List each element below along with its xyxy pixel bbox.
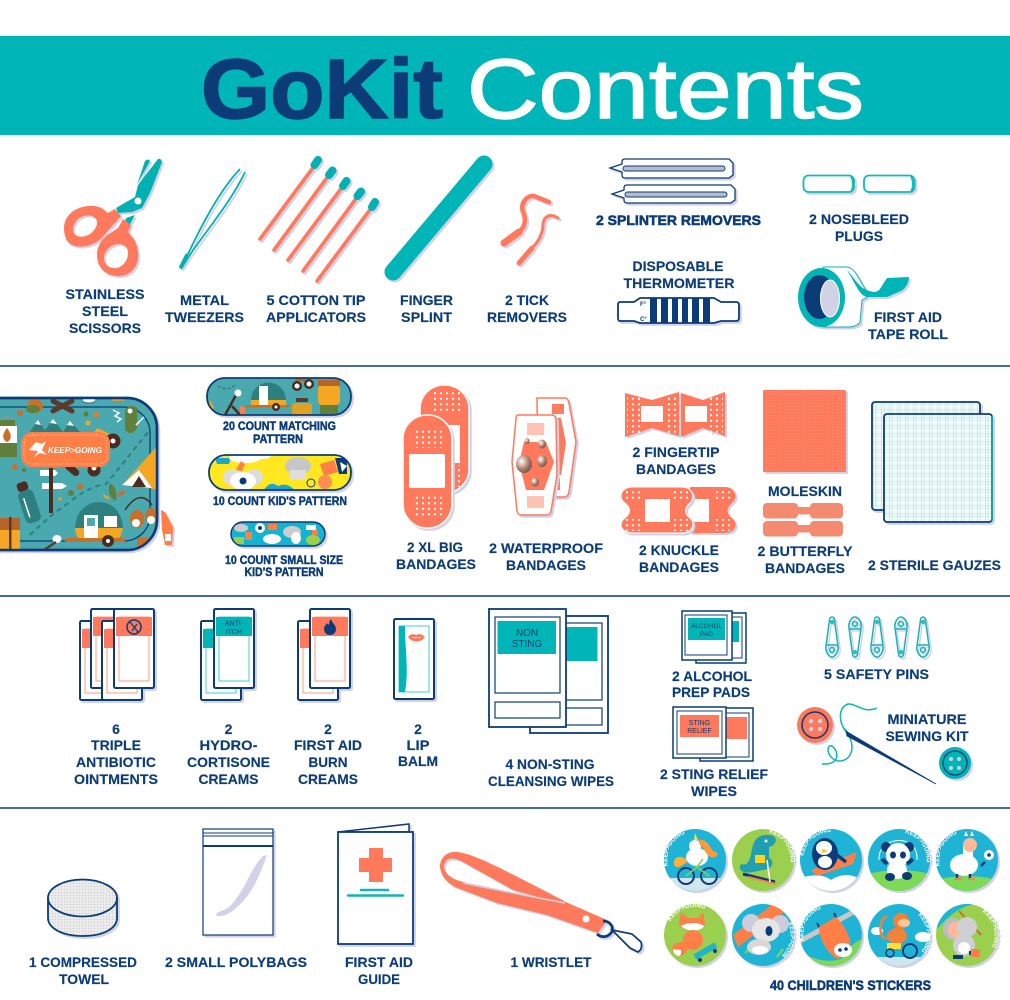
icon: ointment packets [80,609,154,700]
label: lip balm: 2 [414,721,422,737]
sticker: monkey: KEEP>GOING [918,913,933,955]
sticker: panda [868,829,933,893]
label: scissors: STAINLESS [66,286,144,302]
label: matching strip: 20 COUNT MATCHING [223,421,336,433]
item: finger splint [393,164,484,325]
icon: hydrocortisone packets [201,609,254,700]
icon: alcohol pads [696,613,746,663]
item: butterfly bandages [758,503,853,576]
icon: wristlet [440,852,642,952]
title: Contents: Contents [467,42,864,136]
icon: polybag [203,829,273,935]
item: sterile gauzes [868,402,1001,573]
label: towel: TOWEL [59,971,109,987]
sticker: panda: KEEP>GOING [905,830,933,864]
icon: thermometer: F° [640,302,647,308]
sticker: penguin: KEEP>GOING [800,829,831,856]
label: nosebleed plugs: 2 NOSEBLEED [809,211,909,227]
label: knuckle bandages: 2 KNUCKLE [639,542,719,558]
label: XL bandages: 2 XL BIG [407,539,463,555]
icon: coral button [797,707,833,743]
label: scissors: STEEL [82,303,128,319]
label: fingertip bandages: BANDAGES [636,461,716,477]
sticker: llama [936,829,1000,893]
label: sewing kit: SEWING KIT [886,728,969,744]
panel: creams and wipes [74,609,971,799]
label: finger splint: FINGER [400,292,453,308]
label: ointments: 6 [112,721,120,737]
sticker: koala [732,904,797,968]
icon: sterile gauzes [872,402,980,510]
label: burn creams: BURN [308,754,348,770]
label: wristlet: 1 WRISTLET [510,954,592,970]
icon: patterned pouch [0,397,173,550]
label: alcohol pads: PREP PADS [672,684,750,700]
icon: moleskin sheet [763,390,846,472]
item: first aid guide [338,824,413,987]
icon: burn cream packets [298,609,350,700]
item: sewing kit [797,704,971,784]
panel: tools [64,159,948,342]
icon: thermometer: C° [640,317,647,323]
label: lip balm: LIP [406,737,430,753]
icon: fingertip bandages [625,392,725,437]
sticker: unicorn: KEEP>GOING [664,831,684,866]
item: hydrocortisone creams [187,609,270,787]
icon: small strip [231,522,325,546]
item: wristlet [440,852,642,970]
label: matching strip: PATTERN [253,434,303,446]
label: waterproof bandages: BANDAGES [506,557,586,573]
item: splinter removers [596,159,761,228]
label: lip balm: BALM [398,753,438,769]
label: towel: 1 COMPRESSED [29,954,137,970]
panel: bandages [0,374,1001,579]
label: non-sting wipes: CLEANSING WIPES [488,773,614,789]
icon: tweezers [180,169,245,269]
item: small kid's pattern strip [225,522,343,579]
label: sewing kit: MINIATURE [888,711,966,727]
item: knuckle bandages [621,487,736,575]
item: alcohol prep pads: ALCOHOL [691,623,722,630]
item: polybags [165,829,307,970]
icon: zipper pull [161,510,173,545]
label: stickers: 40 CHILDREN'S STICKERS [770,977,931,993]
icon: cotton tips [260,160,375,281]
label: ointments: OINTMENTS [74,771,158,787]
sticker: penguin [800,829,864,893]
item: XL big bandages [396,385,476,572]
label: polybags: 2 SMALL POLYBAGS [165,954,307,970]
label: thermometer: DISPOSABLE [632,258,724,274]
icon: splinter removers [610,159,735,203]
item: alcohol prep pads [672,611,752,700]
icon: knuckle bandages [685,487,736,533]
sticker: fox [664,904,728,968]
sticker: sloth [800,904,864,968]
icon: compressed towel [48,880,117,936]
label: small strip: 10 COUNT SMALL SIZE [225,555,343,567]
icon: butterfly bandages [763,503,843,536]
label: XL bandages: BANDAGES [396,556,476,572]
icon: XL bandages [420,385,469,493]
item: non-sting wipes [488,609,614,789]
icon: kid's strip [209,453,351,490]
item: burn creams [294,609,362,787]
panel: extras [29,823,1001,993]
icon: hydrocortisone packets: ITCH [226,629,242,636]
item: tweezers [165,169,245,325]
label: safety pins: 5 SAFETY PINS [824,666,929,682]
label: butterfly bandages: 2 BUTTERFLY [758,543,853,559]
label: ointments: ANTIBIOTIC [76,754,156,770]
icon: nosebleed plugs [804,176,914,192]
icon: needle and thread [822,704,936,784]
label: thermometer: THERMOMETER [624,275,734,291]
item: matching pattern bandage strip [207,374,351,446]
label: ointments: TRIPLE [91,737,141,753]
label: nosebleed plugs: PLUGS [835,228,883,244]
icon: teal button [939,747,971,779]
icon: lip balm packet [394,619,434,699]
sticker: koala: KEEP>GOING [782,922,797,960]
label: first aid guide: FIRST AID [345,954,413,970]
label: tweezers: METAL [180,292,229,308]
icon: tape roll [798,267,909,327]
icon: hydrocortisone packets: ANTI- [225,620,244,628]
item: tape roll [798,267,948,342]
item: sting relief wipes: STING [689,720,710,727]
label: sterile gauzes: 2 STERILE GAUZES [868,557,1001,573]
title: GoKit: GoKit [201,42,443,136]
label: fingertip bandages: 2 FINGERTIP [632,444,720,460]
icon: finger splint [393,164,484,272]
label: tick removers: 2 TICK [505,292,549,308]
item: compressed towel [29,880,137,987]
label: sting relief wipes: WIPES [691,783,737,799]
item: non-sting wipes: STING [512,639,542,650]
item: moleskin [763,390,846,499]
item: kid's pattern bandage strip [209,453,351,508]
item: lip balm [394,619,438,769]
icon: safety pins [826,617,929,657]
label: sting relief wipes: 2 STING RELIEF [660,766,768,782]
item: waterproof bandages [489,398,603,573]
sticker: fox: KEEP>GOING [668,904,706,922]
item: nosebleed plugs [804,176,914,244]
item: children's stickers [664,829,1001,993]
sticker: elephant [936,904,1001,968]
item: safety pins [824,617,929,682]
label: burn creams: 2 [324,721,332,737]
icon: matching strip [207,374,351,415]
icon: first aid guide [338,824,413,944]
item: tick removers [487,196,567,325]
icon: scissors [64,159,162,276]
label: non-sting wipes: 4 NON-STING [506,756,595,772]
sticker: elephant: KEEP>GOING [982,910,1001,950]
label: tweezers: TWEEZERS [165,309,244,325]
sticker: unicorn [664,829,728,893]
label: knuckle bandages: BANDAGES [639,559,719,575]
item: scissors [64,159,162,336]
label: scissors: SCISSORS [69,320,141,336]
sticker: sloth: KEEP>GOING [800,906,820,942]
label: finger splint: SPLINT [401,309,452,325]
item: fingertip bandages [625,392,725,477]
label: small strip: KID'S PATTERN [244,567,324,579]
item: thermometer [618,258,739,323]
sticker: dinosaur: KEEP>GOING [769,830,797,864]
label: butterfly bandages: BANDAGES [765,560,845,576]
item: non-sting wipes: NON [516,628,538,639]
item: alcohol prep pads: PAD [700,631,713,638]
icon: waterproof bandages [537,398,576,497]
icon: sting relief wipes [700,708,753,761]
icon: thermometer [618,298,739,323]
label: kid's strip: 10 COUNT KID'S PATTERN [213,496,347,508]
sticker: monkey [868,904,933,968]
label: moleskin: MOLESKIN [768,483,842,499]
label: hydrocortisone: HYDRO- [200,737,258,753]
item: sting relief wipes [660,707,768,799]
label: alcohol pads: 2 ALCOHOL [672,668,752,684]
label: hydrocortisone: 2 [225,721,233,737]
label: cotton tips: 5 COTTON TIP [266,292,366,308]
icon: non-sting wipes [530,616,608,733]
label: pouch badge: KEEP>GOING [48,446,102,455]
item: sting relief wipes: RELIEF [687,728,712,735]
label: splinter removers: 2 SPLINTER REMOVERS [596,212,761,228]
label: tape roll: TAPE ROLL [868,326,948,342]
label: pouch badge [21,432,110,467]
item: cotton tip applicators [260,160,375,325]
label: hydrocortisone: CREAMS [198,771,258,787]
sticker: dinosaur [732,829,797,893]
label: tape roll: FIRST AID [874,309,942,325]
title banner [0,36,1010,136]
label: hydrocortisone: CORTISONE [187,754,270,770]
label: burn creams: CREAMS [298,771,358,787]
sticker: llama: KEEP>GOING [936,831,956,866]
label: burn creams: FIRST AID [294,737,362,753]
label: waterproof bandages: 2 WATERPROOF [489,540,603,556]
icon: tick removers [504,196,558,263]
label: cotton tips: APPLICATORS [266,309,366,325]
item: triple antibiotic ointments [74,609,158,787]
label: first aid guide: GUIDE [358,971,400,987]
label: tick removers: REMOVERS [487,309,567,325]
